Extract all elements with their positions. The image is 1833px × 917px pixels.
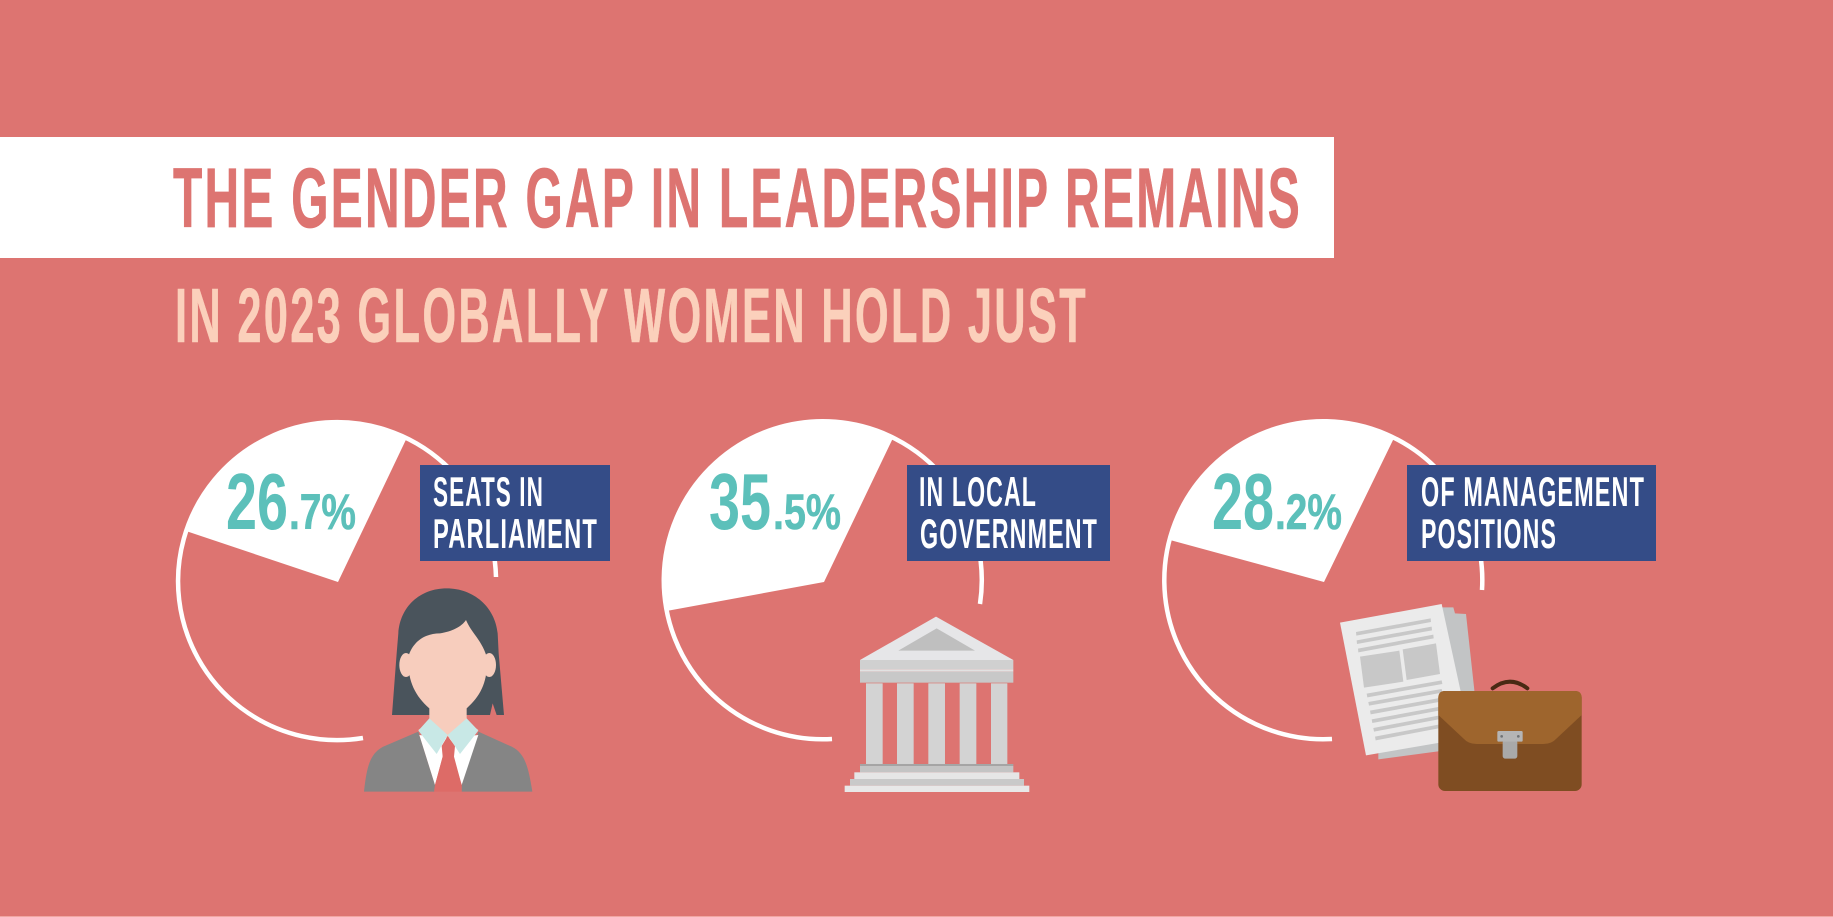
icon: documents and briefcase xyxy=(1340,604,1582,791)
icon: government building xyxy=(845,617,1029,792)
label: seats in parliament: SEATS IN xyxy=(433,468,544,515)
panel: local government xyxy=(664,421,1110,792)
subtitle: IN 2023 GLOBALLY WOMEN HOLD JUST xyxy=(175,273,1088,359)
value: 35.5%: 35 xyxy=(709,457,771,546)
value: 26.7% xyxy=(226,457,356,546)
value: 28.2%: 28 xyxy=(1212,457,1274,546)
pie chart: 28.2% xyxy=(1164,421,1482,739)
label: seats in parliament: PARLIAMENT xyxy=(433,510,598,557)
label: in local government xyxy=(907,465,1110,561)
value: 35.5%: .5% xyxy=(773,484,841,540)
label: of management positions: POSITIONS xyxy=(1421,510,1557,557)
title banner xyxy=(0,137,1334,258)
label: of management positions: OF MANAGEMENT xyxy=(1421,468,1645,515)
pie chart: 26.7% xyxy=(178,421,496,740)
label: in local government: IN LOCAL xyxy=(919,468,1037,515)
panel: seats in parliament xyxy=(178,421,610,792)
icon: businesswoman xyxy=(364,588,532,792)
value: 28.2%: .2% xyxy=(1275,484,1342,540)
value: 28.2% xyxy=(1212,457,1342,546)
label: seats in parliament xyxy=(420,465,610,561)
value: 35.5% xyxy=(709,457,841,546)
label: in local government: GOVERNMENT xyxy=(920,510,1098,557)
label: of management positions xyxy=(1407,465,1656,561)
value: 26.7%: .7% xyxy=(289,484,356,540)
value: 26.7%: 26 xyxy=(226,457,288,546)
pie chart: 35.5% xyxy=(664,421,982,739)
panel: management positions xyxy=(1164,421,1656,791)
